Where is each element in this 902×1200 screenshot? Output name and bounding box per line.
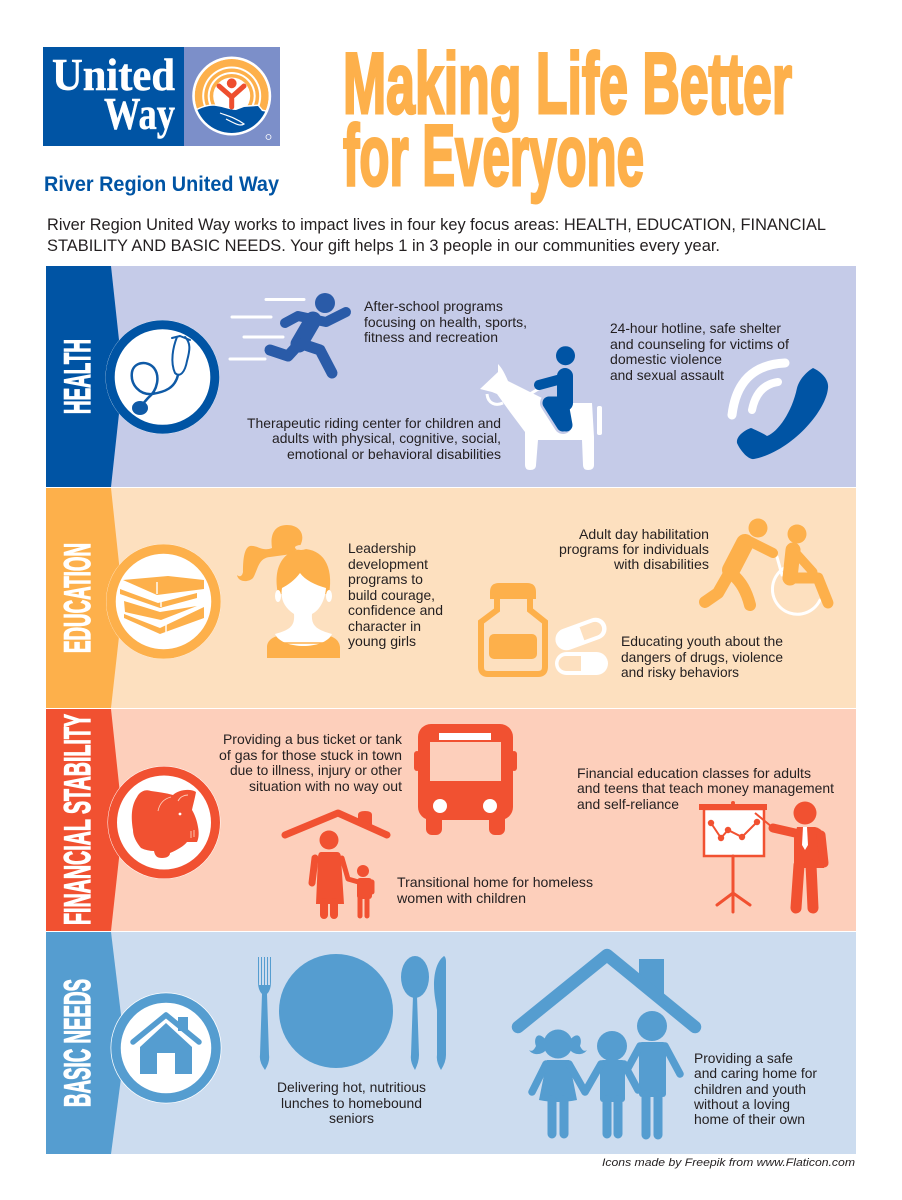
text: after-school: focusing on health, sports,	[364, 314, 527, 330]
text: educating youth	[621, 633, 783, 680]
credit line: Icons made by Freepik from www.Flaticon.com	[602, 1157, 855, 1169]
text: after-school	[364, 298, 527, 345]
text: hotline: 24-hour hotline, safe shelter	[610, 320, 781, 336]
text: leadership: development	[348, 556, 428, 572]
text: transitional home: women with children	[396, 890, 526, 906]
icon: mother and child under roof	[285, 811, 387, 916]
icon: fork, plate, spoon and knife	[258, 954, 446, 1070]
text: educating youth: dangers of drugs, violence	[621, 649, 783, 665]
text: bus ticket: Providing a bus ticket or tank	[223, 731, 403, 747]
text: leadership: build courage,	[348, 587, 435, 603]
icon: family under roof	[518, 955, 695, 1135]
text: hotline: and counseling for victims of	[610, 336, 789, 352]
text: hotline	[610, 320, 789, 383]
text: hotline: and sexual assault	[610, 367, 724, 383]
title	[343, 36, 792, 204]
text: after-school: After-school programs	[364, 298, 503, 314]
text: educating youth: Educating youth about the	[621, 633, 783, 649]
text: leadership: young girls	[348, 633, 416, 649]
text: adult day habilitation: Adult day habilitation	[579, 526, 709, 542]
text: transitional home: Transitional home for homeless	[397, 874, 593, 890]
icon: girl with ponytail	[237, 525, 340, 658]
panel: education	[46, 488, 856, 708]
icon: bus	[414, 724, 517, 835]
text: financial education	[577, 765, 834, 812]
text: adult day habilitation: with disabilities	[613, 556, 709, 572]
icon: pills	[552, 615, 610, 675]
text: bus ticket	[219, 731, 403, 794]
text: therapeutic riding: emotional or behavioral disabilities	[287, 446, 501, 462]
heading: education: EDUCATION	[57, 543, 98, 653]
intro text	[47, 216, 826, 255]
text: leadership: Leadership	[348, 540, 416, 556]
text: safe home: children and youth	[694, 1081, 806, 1097]
text: adult day habilitation	[559, 526, 709, 572]
text: delivering lunches	[277, 1079, 426, 1126]
text: delivering lunches: lunches to homebound	[281, 1095, 422, 1111]
text: leadership	[348, 540, 443, 649]
icon: runner	[230, 293, 346, 373]
text: therapeutic riding: adults with physical, cognitive, social,	[272, 430, 501, 446]
text: bus ticket: of gas for those stuck in town	[219, 747, 402, 763]
icon: stethoscope	[106, 320, 220, 434]
organisation name: River Region United Way	[44, 173, 279, 196]
icon: horse and rider	[480, 346, 602, 470]
text: safe home: home of their own	[694, 1111, 805, 1127]
text: safe home: without a loving	[693, 1096, 790, 1112]
text: leadership: character in	[348, 618, 421, 634]
text: delivering lunches: Delivering hot, nutritious	[277, 1079, 426, 1095]
text: educating youth: and risky behaviors	[621, 664, 739, 680]
text: delivering lunches: seniors	[329, 1110, 374, 1126]
text: after-school: fitness and recreation	[364, 329, 498, 345]
title: for Everyone	[343, 108, 644, 204]
text: hotline: domestic violence	[610, 351, 722, 367]
panel: health	[46, 266, 856, 487]
text: financial education: and self-reliance	[577, 796, 679, 812]
text: safe home: Providing a safe	[694, 1050, 793, 1066]
logo: United Way: Way	[104, 89, 175, 139]
text: leadership: programs to	[348, 571, 423, 587]
text: safe home: and caring home for	[694, 1065, 817, 1081]
text: bus ticket: situation with no way out	[249, 778, 402, 794]
text: therapeutic riding	[247, 415, 501, 462]
icon: house	[110, 992, 222, 1104]
icon: piggy bank	[108, 766, 220, 879]
heading: financial stability: FINANCIAL STABILITY	[57, 714, 98, 925]
text: transitional home	[396, 874, 593, 906]
text: financial education: and teens that teach money management	[577, 780, 834, 796]
icon: person pushing wheelchair	[705, 518, 828, 614]
text: safe home	[693, 1050, 817, 1127]
icon: books	[106, 544, 221, 659]
panel: basic needs	[46, 932, 856, 1154]
icon: medicine bottle	[481, 583, 545, 674]
text: financial education: Financial education classes for adults	[577, 765, 811, 781]
heading: health: HEALTH	[57, 339, 98, 414]
intro text: River Region United Way works to impact lives in four key focus areas: HEALTH, EDUCATION, FINANCIAL	[47, 216, 826, 234]
heading: basic needs: BASIC NEEDS	[57, 979, 98, 1107]
icon: presenter with chart	[699, 801, 824, 912]
text: therapeutic riding: Therapeutic riding center for children and	[247, 415, 501, 431]
text: bus ticket: due to illness, injury or other	[230, 762, 402, 778]
logo: United Way: United	[52, 50, 175, 100]
intro text: STABILITY AND BASIC NEEDS. Your gift helps 1 in 3 people in our communities every year.	[47, 237, 720, 255]
panel: financial stability	[46, 709, 856, 931]
text: adult day habilitation: programs for individuals	[559, 541, 709, 557]
logo: United Way	[43, 47, 280, 146]
text: leadership: confidence and	[348, 602, 443, 618]
icon: telephone	[732, 363, 828, 459]
